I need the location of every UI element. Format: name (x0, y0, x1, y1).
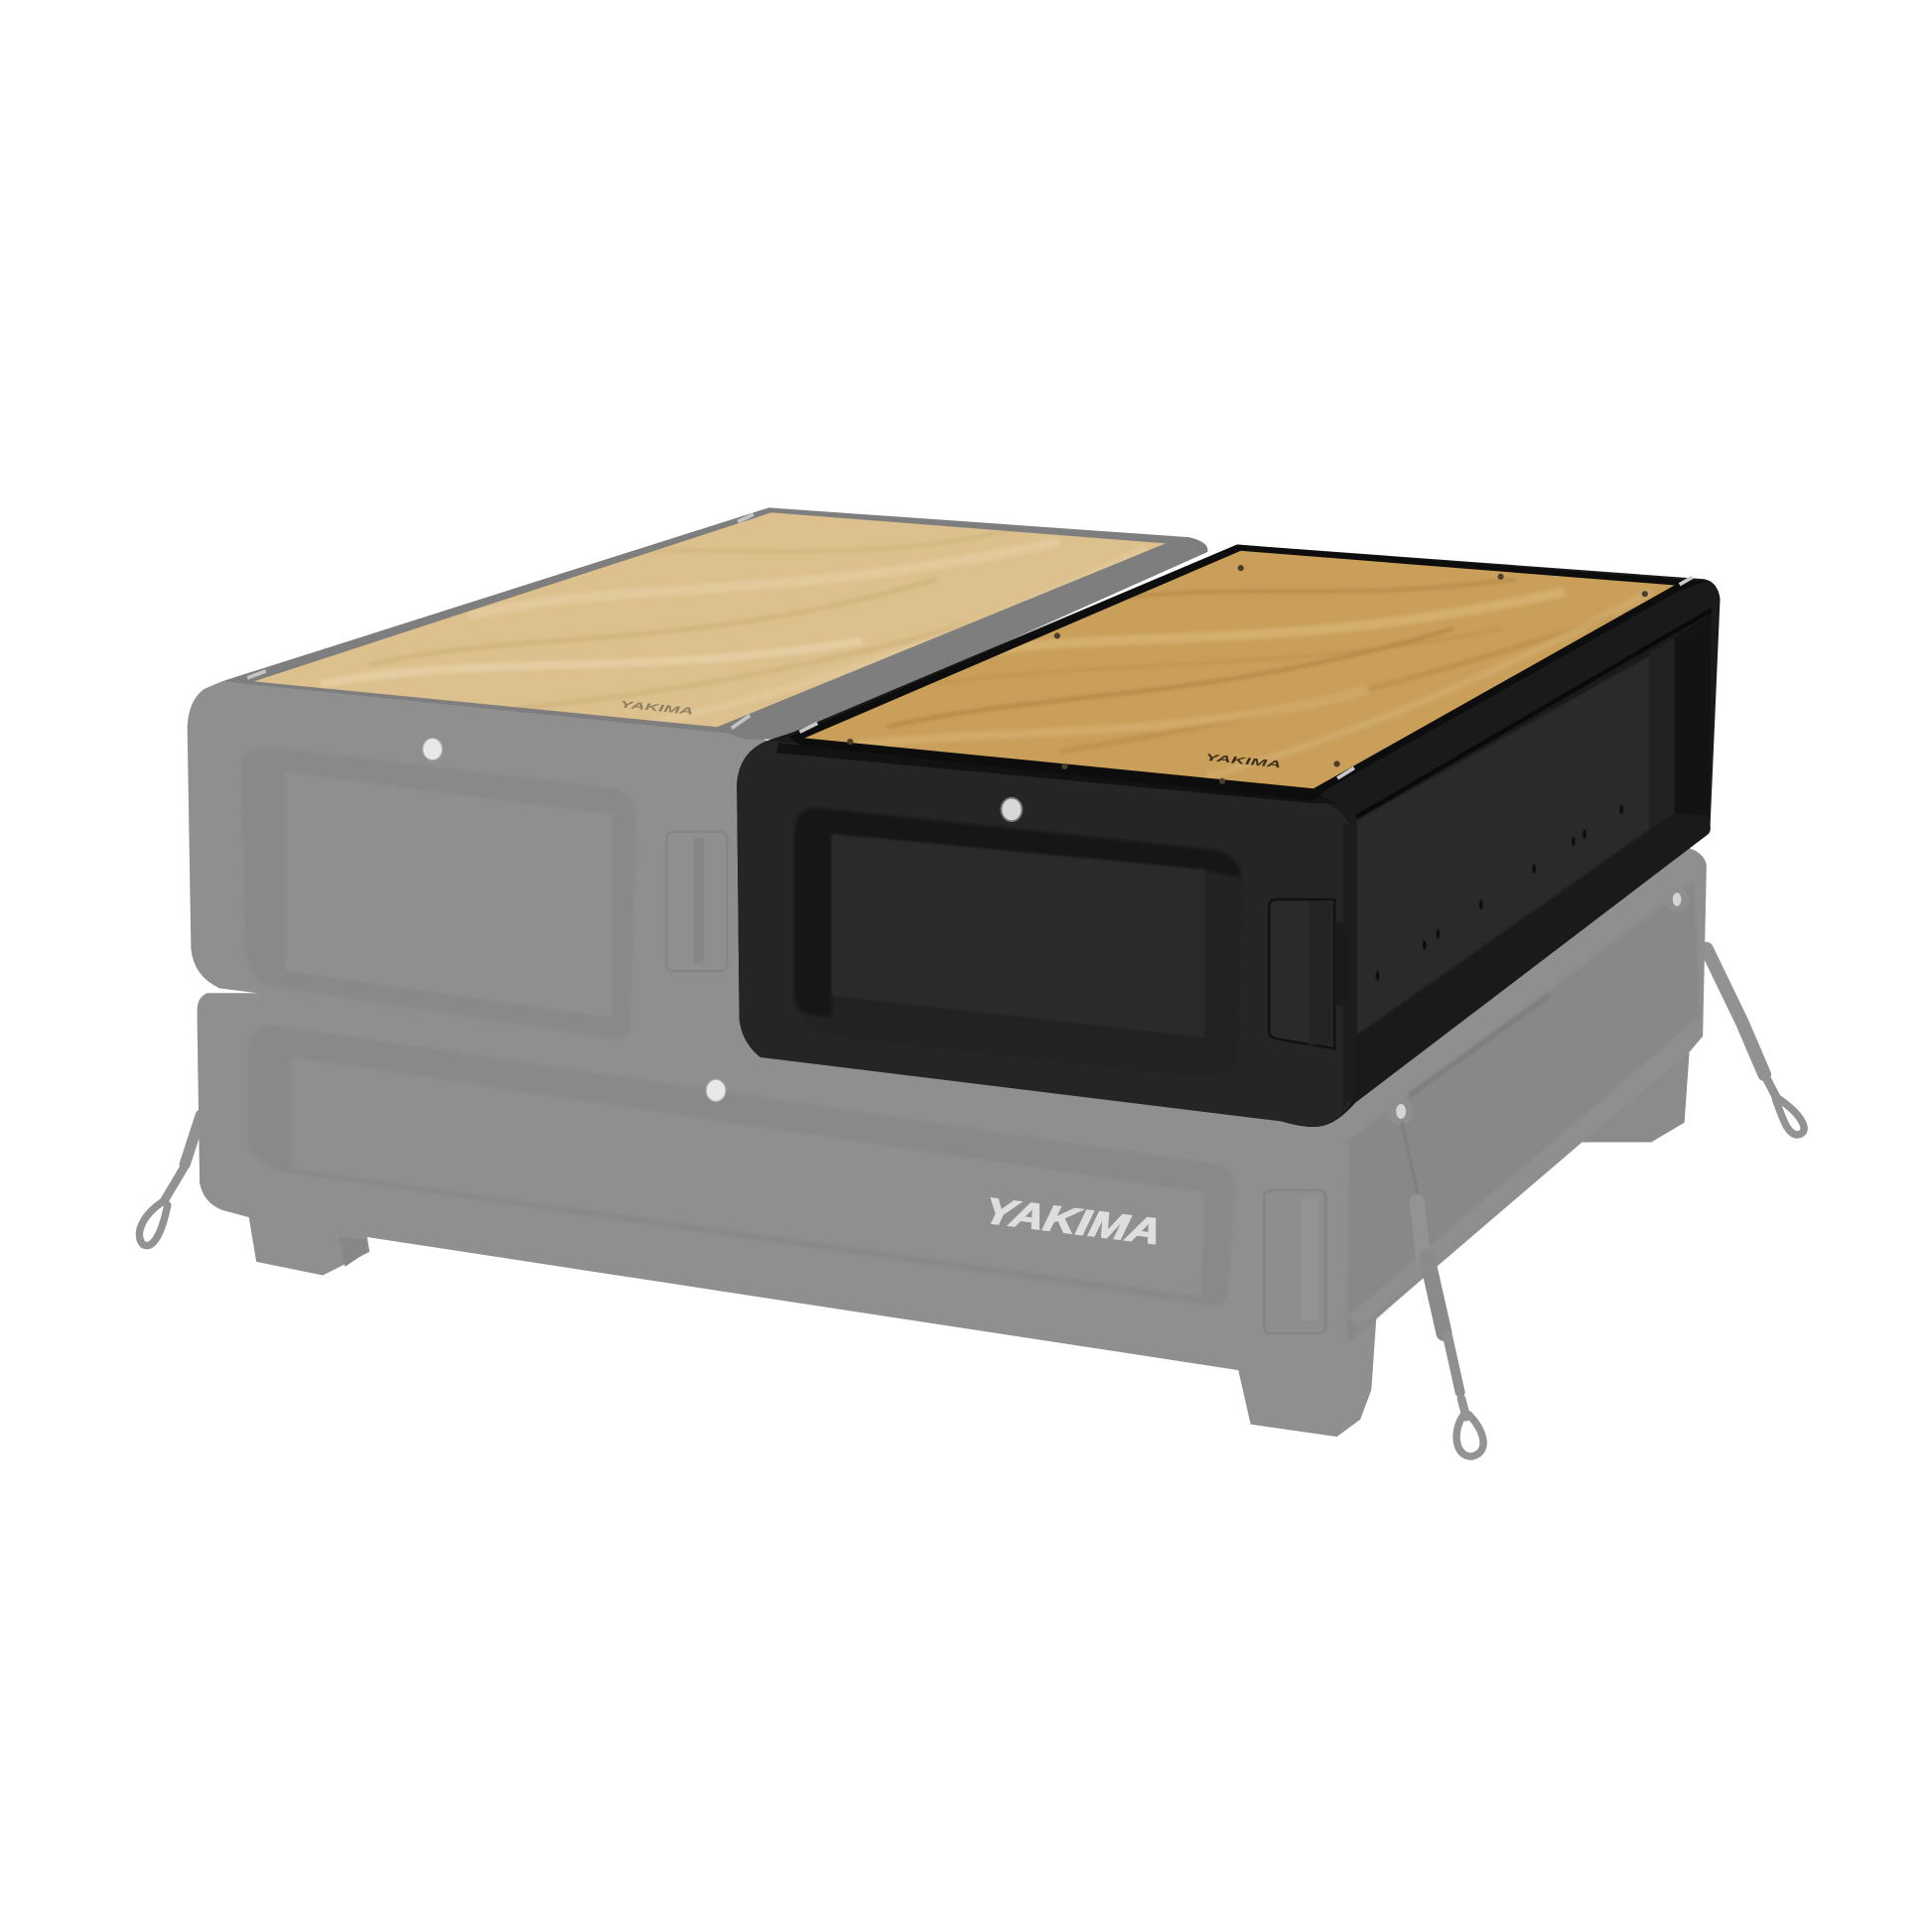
grey box hinges (246, 512, 755, 730)
strap: rear right (1707, 949, 1804, 1135)
black box top rim (776, 743, 1335, 803)
product illustration: stacked storage boxes (135, 507, 1808, 1460)
grey box front recess (241, 747, 637, 1039)
black box front recess (794, 808, 1241, 1076)
washer: front corner (1386, 1098, 1414, 1125)
base side lower strip (1346, 1018, 1701, 1328)
base inner panel (291, 1057, 1205, 1297)
base side groove (1410, 996, 1549, 1095)
black box hinge strip (1343, 823, 1356, 1109)
base front recess (247, 1026, 1235, 1307)
black box lid groove (1356, 610, 1712, 817)
base far leg shade (1583, 1052, 1690, 1142)
black box wood top (804, 551, 1675, 788)
grey box knob (423, 738, 443, 760)
grey box wood brand: YAKIMA (620, 699, 694, 718)
black box handle (1269, 899, 1346, 1048)
black box side panel (1356, 655, 1650, 1035)
grey box wood top (254, 512, 1166, 727)
base side shading (1346, 881, 1701, 1343)
grey storage box (ghosted) (188, 507, 1208, 1057)
black box recess top and left shadow (794, 808, 1241, 1017)
black box side rib (1650, 638, 1675, 829)
black box wood screws (847, 565, 1648, 784)
base leg ribs (339, 1237, 367, 1267)
black box inner panel (832, 834, 1205, 1037)
black box knob (1001, 798, 1022, 821)
washer: rear corner (1665, 888, 1690, 911)
black box wood brand: YAKIMA (1204, 753, 1282, 770)
base handle (1264, 1190, 1325, 1333)
black box lid frame (788, 545, 1707, 801)
grey box lid frame (221, 507, 1208, 740)
black box body (737, 545, 1721, 1127)
base unit (198, 848, 1707, 1437)
base knob (706, 1079, 726, 1102)
black box front face (737, 741, 1354, 1127)
strap: left (139, 1115, 201, 1246)
strap: front right (1402, 1124, 1483, 1456)
black box side holes (1376, 804, 1623, 981)
grey box inner panel (286, 772, 613, 1018)
grey box body (188, 681, 788, 1057)
black box hinges (799, 576, 1693, 780)
black box end cavity (1675, 613, 1712, 816)
logo: YAKIMA: YAKIMA (980, 1190, 1166, 1252)
grey box handle (666, 832, 727, 971)
black storage box (737, 545, 1721, 1127)
